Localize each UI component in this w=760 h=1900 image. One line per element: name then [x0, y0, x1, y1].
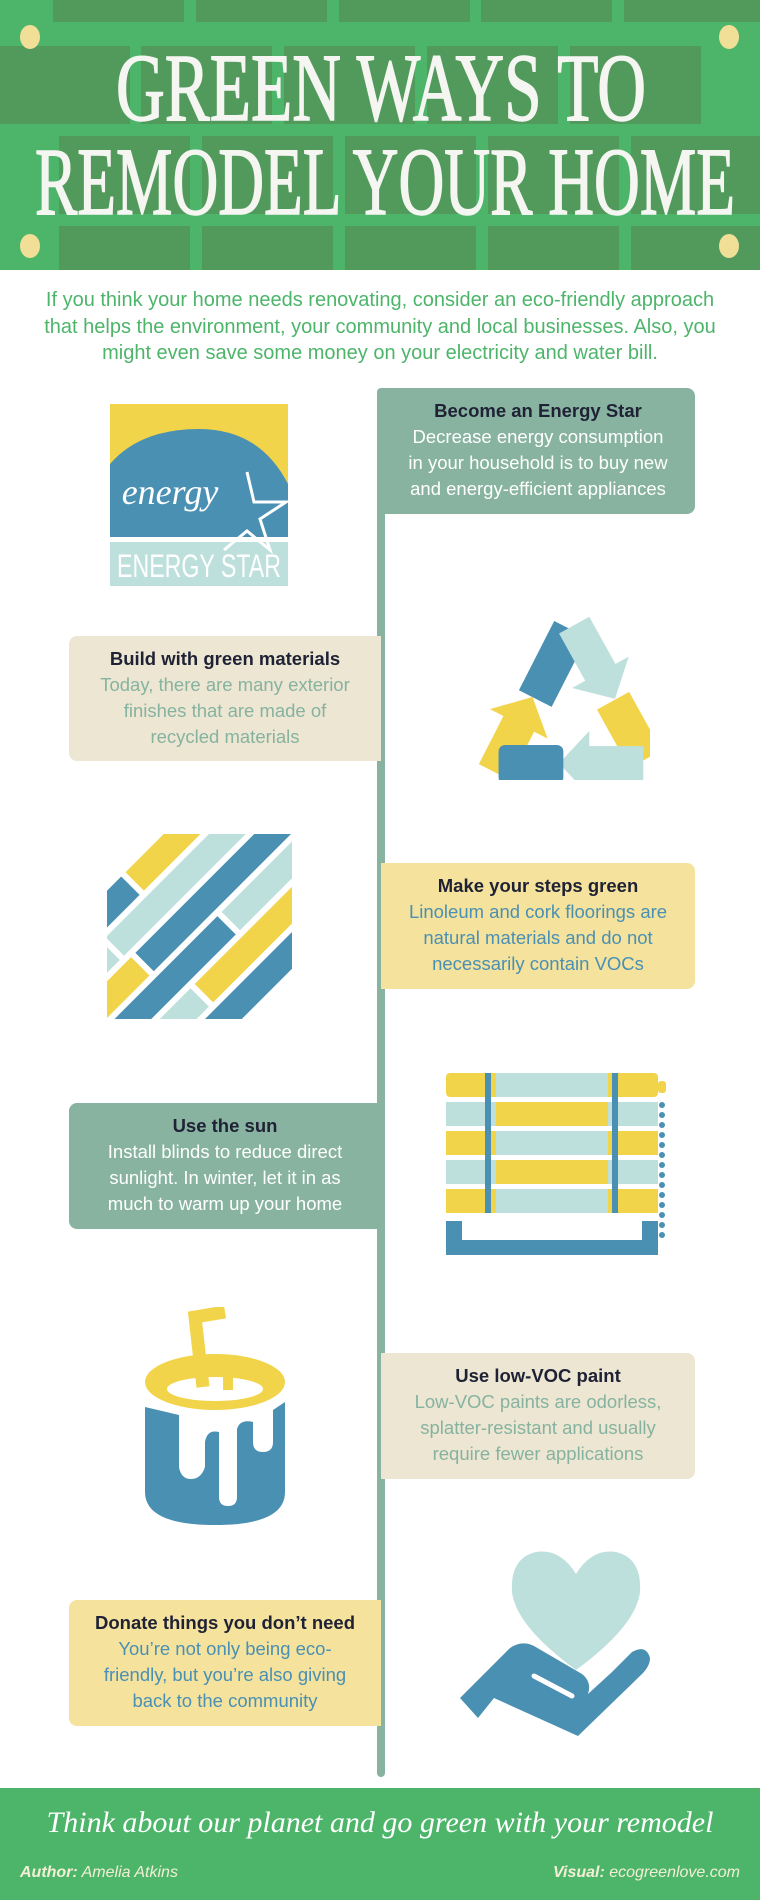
- footer: [0, 1788, 760, 1900]
- box: use low-VOC paint: Use low-VOC paint: [455, 1365, 621, 1386]
- box: make your steps green: [381, 863, 695, 989]
- box: use low-VOC paint: Low-VOC paints are odorless,: [415, 1391, 661, 1412]
- header banner: [0, 0, 760, 270]
- box: build with green materials: Today, there are many exterior: [100, 674, 350, 695]
- box: donate things: Donate things you don’t need: [95, 1612, 355, 1633]
- box: donate things: friendly, but you’re also giving: [104, 1664, 346, 1685]
- box: use the sun: [69, 1103, 381, 1229]
- credit: author: Author: Amelia Atkins: [20, 1864, 178, 1881]
- icon: heart in hand: [460, 1552, 650, 1736]
- box: use the sun: Use the sun: [173, 1115, 277, 1136]
- icon: energy star logo: energy: [122, 472, 218, 512]
- box: become an energy star: Become an Energy Star: [434, 400, 642, 421]
- box: use low-VOC paint: splatter-resistant and usually: [420, 1417, 656, 1438]
- box: build with green materials: recycled materials: [150, 726, 300, 747]
- box: use low-VOC paint: require fewer applications: [433, 1443, 643, 1464]
- box: become an energy star: Decrease energy consumption: [413, 426, 663, 447]
- box: donate things: back to the community: [132, 1690, 318, 1711]
- title: [35, 34, 735, 235]
- box: donate things: [69, 1600, 381, 1726]
- box: build with green materials: [69, 636, 381, 761]
- box: make your steps green: necessarily contain VOCs: [432, 953, 644, 974]
- box: use the sun: Install blinds to reduce direct: [108, 1141, 342, 1162]
- box: build with green materials: Build with green materials: [110, 648, 340, 669]
- box: build with green materials: finishes that are made of: [124, 700, 326, 721]
- icon: recycle: [478, 616, 650, 780]
- timeline line: [377, 388, 385, 1777]
- intro text: [44, 289, 716, 364]
- intro text: that helps the environment, your community and local businesses. Also, you: [44, 316, 716, 338]
- icon: energy star logo: [110, 404, 288, 586]
- box: use the sun: sunlight. In winter, let it in as: [109, 1167, 341, 1188]
- box: use the sun: much to warm up your home: [108, 1193, 342, 1214]
- credit: visual: Visual: ecogreenlove.com: [553, 1864, 740, 1881]
- footer tagline: Think about our planet and go green with your remodel: [47, 1806, 713, 1839]
- icon: paint bucket: [145, 1307, 285, 1525]
- box: make your steps green: Linoleum and cork floorings are: [409, 901, 667, 922]
- intro text: might even save some money on your electricity and water bill.: [102, 342, 658, 364]
- box: use low-VOC paint: [381, 1353, 695, 1479]
- box: make your steps green: natural materials and do not: [423, 927, 653, 948]
- box: become an energy star: and energy-efficient appliances: [410, 478, 666, 499]
- box: become an energy star: in your household is to buy new: [408, 452, 668, 473]
- box: donate things: You’re not only being eco-: [118, 1638, 332, 1659]
- icon: window blinds: [446, 1073, 666, 1255]
- box: become an energy star: [381, 388, 695, 514]
- intro text: If you think your home needs renovating, consider an eco-friendly approach: [46, 289, 714, 311]
- icon: diagonal floor tiles: [107, 834, 292, 1019]
- box: make your steps green: Make your steps green: [438, 875, 638, 896]
